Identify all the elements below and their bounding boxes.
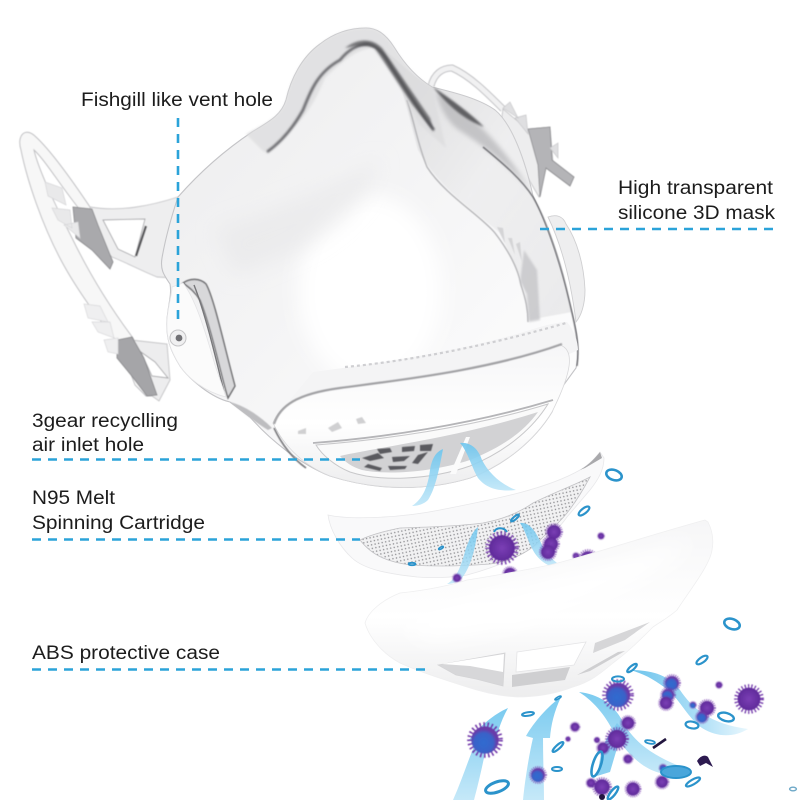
streak right of nose [433,87,484,127]
translucent nose ridge band [246,28,446,152]
translucent right flange [383,48,572,320]
lower right fold [520,250,540,322]
callout: N95 melt spinning cartridge: Spinning Cartridge [32,513,205,534]
vent hole [170,330,186,346]
silver trim line [274,344,562,424]
callout: 3gear recycling air inlet hole: 3gear recyclling [32,411,178,432]
case centre windows [516,642,586,672]
callout: high transparent silicone 3D mask: High transparent [618,178,774,199]
viruses in front of case [470,675,762,796]
housing shell [273,345,569,488]
left cheek panel with vent hole [167,279,235,398]
cartridge tip shadow [580,452,602,470]
grey band on flange [436,92,530,190]
airflow arrows into case [453,670,748,800]
nose ridge dark lines [267,44,434,152]
strap loop band [20,132,156,396]
ledge notches [298,417,366,434]
lower arm [131,340,170,401]
strap loop [431,68,503,109]
right cheek cushion [548,216,585,322]
lower teeth [84,304,118,354]
N95 melt spinning cartridge [328,452,604,578]
cartridge mesh [360,477,590,566]
blue ring particles [409,468,796,800]
callout: fishgill like vent hole: Fishgill like vent hole [81,90,273,111]
callout: 3gear recycling air inlet hole: air inlet hole [32,435,144,456]
viruses behind case [453,524,604,582]
strap band to buckle [500,109,574,197]
inlet strut [450,437,470,474]
case highlight [400,540,690,640]
upper arm window [103,219,145,257]
left ear strap [20,132,178,401]
callout: N95 melt spinning cartridge: N95 Melt [32,488,116,509]
lower rim and housing [230,322,578,488]
case shell [365,520,713,697]
callout: 3gear recycling air inlet hole [32,411,360,460]
callout: high transparent silicone 3D mask: silicone 3D mask [618,203,776,224]
dark particles [599,739,713,800]
callout: N95 melt spinning cartridge [32,488,360,540]
cartridge frame [328,452,604,578]
dark lower rim edge [274,428,306,468]
inner teeth [497,227,522,262]
lower buckle [117,337,157,396]
mask main body [161,28,578,488]
shell outline [161,28,578,488]
rim corrugated edge [345,323,566,367]
ABS protective case [365,520,713,697]
lower body shadow [230,402,272,430]
case left window [438,653,505,686]
cheek channel [183,279,235,398]
interior shading [215,160,380,275]
upper teeth [45,182,80,238]
white flap [167,283,226,397]
grey interior [340,412,538,473]
right buckle [528,127,574,197]
interior highlight [298,195,442,385]
right outer edge [483,147,578,366]
right ear strap [431,68,574,197]
inlet cavity [316,404,548,478]
case right windows [593,622,650,653]
rim band [290,322,578,410]
nose peak shadow [345,40,434,132]
fan grille [362,444,433,471]
inner frame line [313,400,553,443]
inner flange line [407,100,528,322]
upper buckle [73,207,113,269]
callout: high transparent silicone 3D mask [538,178,776,229]
lower arm window [141,352,168,378]
upper arm [90,197,178,278]
right teeth [503,102,558,158]
airflow arrows into mask [412,443,516,506]
airflow arrows through cartridge [447,523,570,584]
callout: ABS protective case: ABS protective case [32,643,220,664]
